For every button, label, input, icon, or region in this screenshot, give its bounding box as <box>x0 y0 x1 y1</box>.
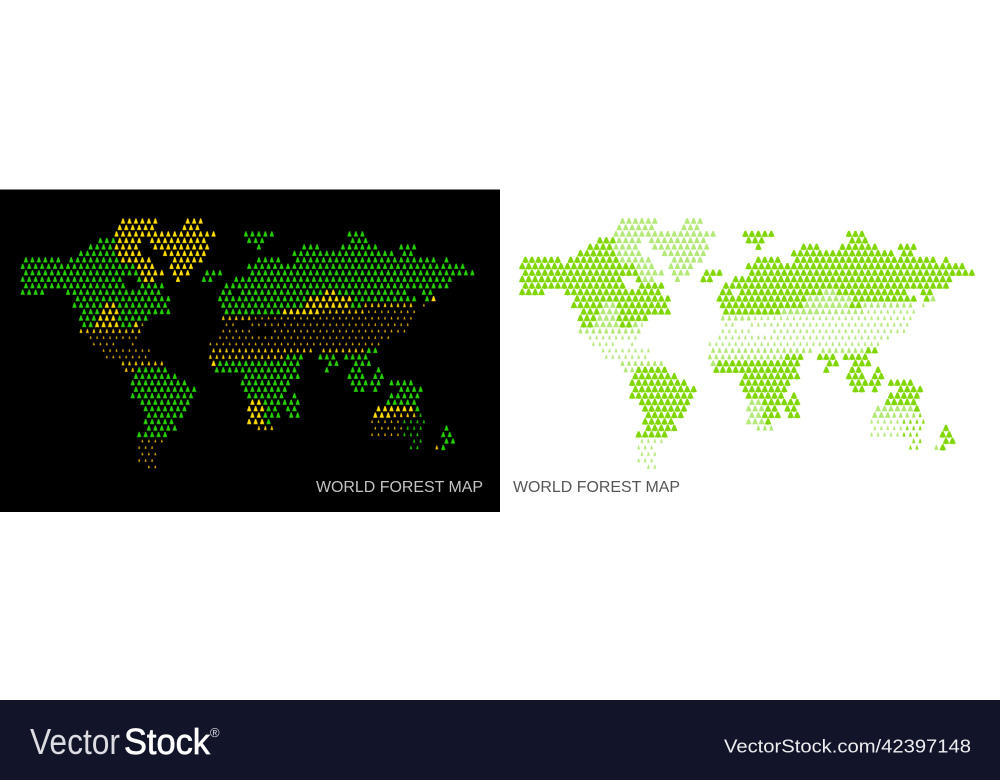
footer bar <box>0 700 1000 780</box>
logo: VectorStock: Stock <box>124 721 211 762</box>
logo: VectorStock: Vector <box>30 721 120 762</box>
logo: VectorStock: ® <box>210 725 220 740</box>
map: dark world forest map <box>19 221 476 467</box>
map: light world forest map <box>519 221 975 467</box>
logo: VectorStock <box>30 721 220 762</box>
title: light panel: WORLD FOREST MAP <box>513 479 680 496</box>
panel: dark map background <box>0 190 500 512</box>
title: dark panel: WORLD FOREST MAP <box>316 479 483 496</box>
footer image id: VectorStock.com/42397148 <box>724 736 971 756</box>
